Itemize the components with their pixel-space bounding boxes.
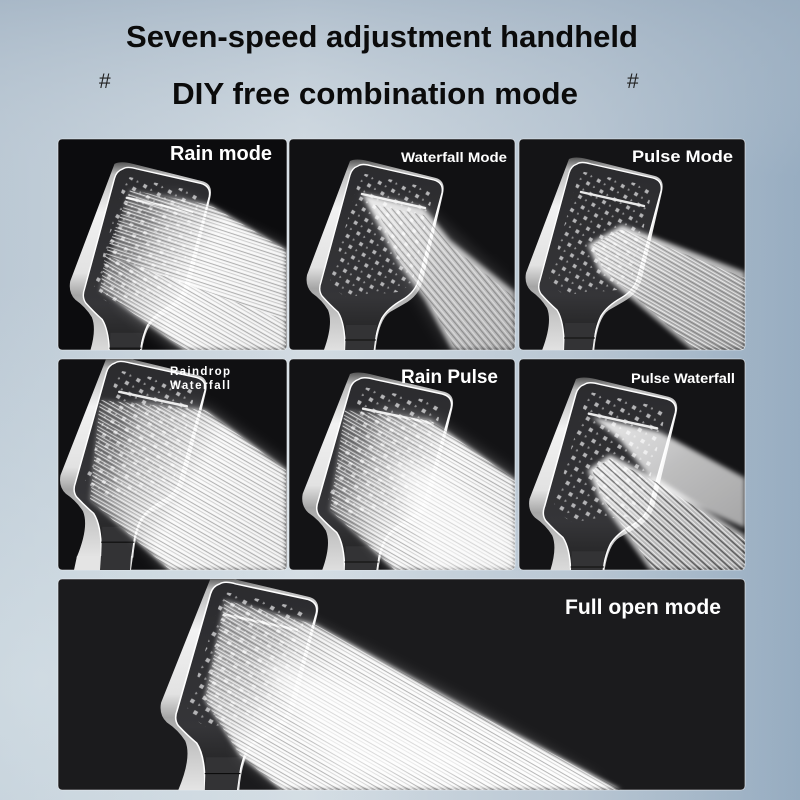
spray: rain glow: [120, 195, 286, 350]
panel: rain pulse: [289, 359, 515, 578]
spray: full open core: [260, 660, 500, 775]
label: Waterfall Mode: [401, 149, 507, 165]
spray: rain pulse body: [330, 410, 515, 570]
spray: full open glow: [240, 620, 600, 785]
spray: full open streaks: [205, 600, 621, 790]
spray: full open body: [205, 600, 621, 790]
spray: rain lower streaks: [100, 255, 286, 350]
spray: pulse cone: [588, 455, 745, 570]
spray: waterfall beam: [592, 417, 745, 528]
spray: waterfall streaks: [375, 205, 515, 350]
label: Waterfall: [170, 380, 230, 392]
panel: rain mode: [58, 139, 287, 364]
icon: shower head: [70, 162, 211, 364]
spray: raindrop streaks: [90, 400, 286, 570]
label: Full open mode: [565, 596, 721, 619]
icon: shower head: [526, 158, 663, 353]
spray: waterfall body: [362, 194, 515, 350]
panel: pulse waterfall: [519, 359, 745, 583]
title: Seven-speed adjustment handheld: [126, 19, 638, 54]
spray: rain body: [100, 190, 286, 350]
icon: shower head: [60, 356, 207, 558]
spray: waterfall glow: [362, 194, 515, 350]
spray: pulse streaks: [592, 459, 745, 570]
label: Rain mode: [170, 143, 272, 165]
spray: rain upper streaks: [105, 190, 286, 320]
panel: raindrop waterfall: [58, 356, 287, 570]
left hash mark: #: [99, 70, 111, 93]
title: [126, 19, 638, 111]
icon: shower head: [307, 160, 444, 355]
panel: full open mode: [58, 577, 745, 790]
icon: shower head: [161, 577, 318, 790]
label: Rain Pulse: [401, 367, 498, 388]
spray: raindrop glow: [110, 400, 286, 570]
panel: pulse mode: [519, 139, 745, 353]
title: DIY free combination mode: [172, 76, 578, 111]
handle extension: [74, 556, 133, 570]
icon: shower head: [302, 372, 453, 578]
label: Pulse Mode: [632, 147, 733, 166]
label: Pulse Waterfall: [631, 370, 735, 386]
icon: shower head: [529, 377, 677, 583]
spray: pulse streaks: [592, 229, 745, 350]
label: [170, 366, 230, 392]
spray: rain pulse streaks: [330, 410, 515, 570]
spray: raindrop body: [90, 400, 286, 570]
panel: waterfall mode: [289, 139, 515, 355]
right hash mark: #: [627, 70, 639, 93]
label: Raindrop: [170, 366, 230, 378]
spray: pulse body: [588, 225, 745, 350]
spray: pulse core: [390, 460, 515, 570]
spray: rain pulse glow: [350, 410, 515, 570]
